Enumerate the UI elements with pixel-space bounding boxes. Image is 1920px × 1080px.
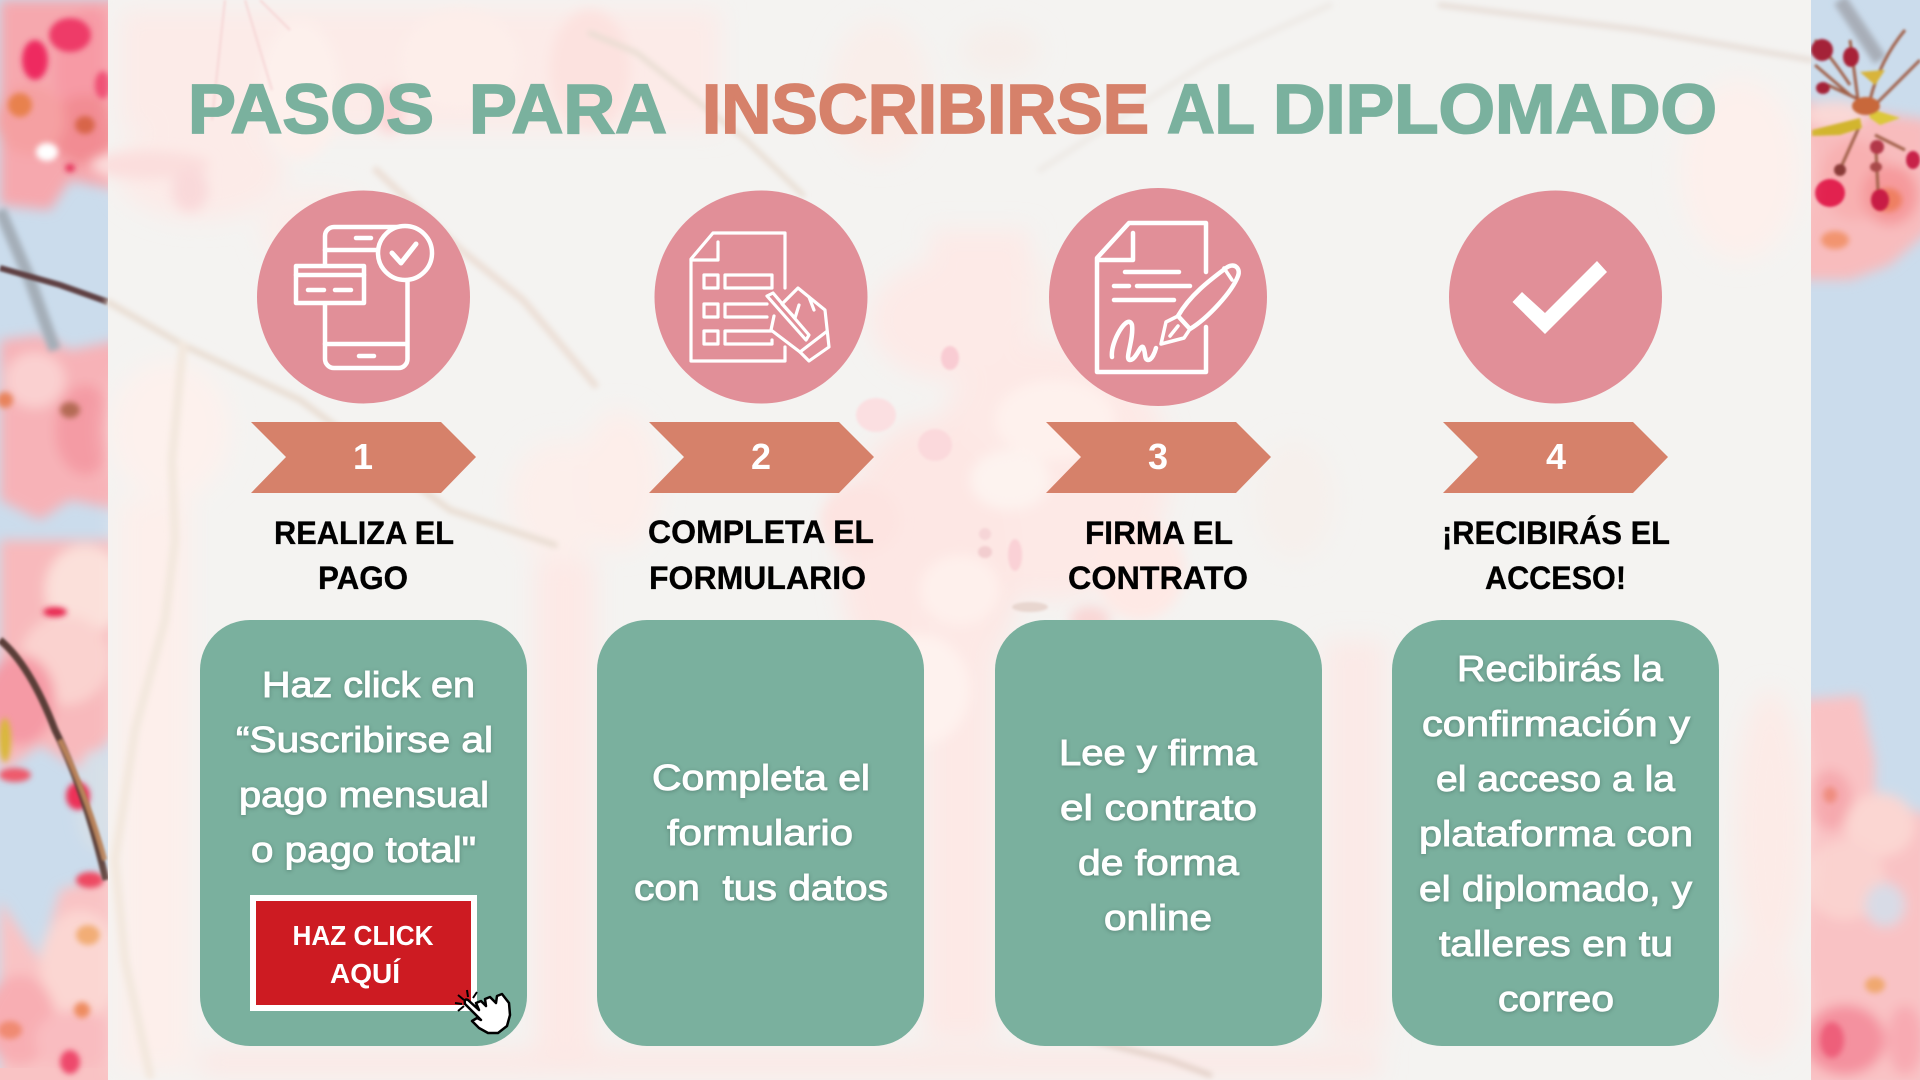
title: PARA [469, 70, 667, 148]
card 2: Completa el [652, 757, 870, 798]
step number chevron 2 [649, 422, 874, 493]
step number chevron 1 [251, 422, 476, 493]
right photo strip [1800, 100, 1920, 1080]
title: INSCRIBIRSE [702, 70, 1149, 148]
card 1: “Suscribirse al [236, 719, 493, 760]
card 3: Lee y firma [1059, 732, 1258, 773]
step heading 3 [1068, 515, 1248, 596]
card 2 [597, 620, 924, 1046]
card 4: plataforma con [1419, 813, 1693, 854]
step heading 1 [274, 515, 454, 596]
icon: check mark [1449, 190, 1662, 404]
card 4: el diplomado, y [1419, 868, 1692, 909]
card 1 [200, 620, 527, 1046]
button: haz click aquí: AQUÍ [330, 958, 401, 989]
card 3: de forma [1078, 842, 1240, 883]
step heading 4 [1442, 515, 1670, 596]
step number chevron 3 [1046, 422, 1271, 493]
card 1: o pago total" [251, 829, 476, 870]
step heading 2: FORMULARIO [649, 560, 866, 596]
title: DIPLOMADO [1273, 70, 1717, 148]
step heading 2: COMPLETA EL [648, 514, 874, 550]
card 2: formulario [667, 812, 853, 853]
step 1 column [200, 190, 527, 1046]
left photo strip [0, 0, 125, 1080]
step 3 column [995, 188, 1322, 1046]
card 4: confirmación y [1422, 703, 1690, 744]
step number chevron 1: 1 [353, 436, 373, 477]
step 2 column [597, 190, 924, 1046]
title: PASOS [188, 70, 434, 148]
icon: clicking hand [455, 990, 510, 1033]
icon: phone payment [257, 190, 470, 404]
card 4: correo [1498, 978, 1614, 1019]
card 3: online [1104, 897, 1212, 938]
card 4: talleres en tu [1439, 923, 1673, 964]
step heading 1: PAGO [318, 560, 408, 596]
title [188, 70, 1717, 148]
card 1: Haz click en [262, 664, 475, 705]
step heading 3: FIRMA EL [1085, 515, 1233, 551]
card 4: Recibirás la [1457, 648, 1664, 689]
card 2: con tus datos [634, 867, 888, 908]
step heading 4: ACCESO! [1485, 560, 1626, 596]
card 4 [1392, 620, 1719, 1046]
step number chevron 4: 4 [1546, 436, 1566, 477]
card 1: pago mensual [239, 774, 489, 815]
title: AL [1167, 70, 1255, 148]
step 4 column [1392, 190, 1719, 1046]
step heading 2 [648, 514, 874, 596]
step heading 4: ¡RECIBIRÁS EL [1442, 515, 1670, 551]
card 3 [995, 620, 1322, 1046]
step number chevron 3: 3 [1148, 436, 1168, 477]
step heading 3: CONTRATO [1068, 560, 1248, 596]
card 4: el acceso a la [1436, 758, 1676, 799]
step number chevron 2: 2 [751, 436, 771, 477]
card 3: el contrato [1060, 787, 1257, 828]
icon: contract and pen [1049, 188, 1267, 406]
step heading 1: REALIZA EL [274, 515, 454, 551]
icon: form and hand [654, 190, 868, 404]
button: haz click aquí: HAZ CLICK [292, 920, 434, 951]
step number chevron 4 [1443, 422, 1668, 493]
button: haz click aquí [253, 898, 474, 1008]
